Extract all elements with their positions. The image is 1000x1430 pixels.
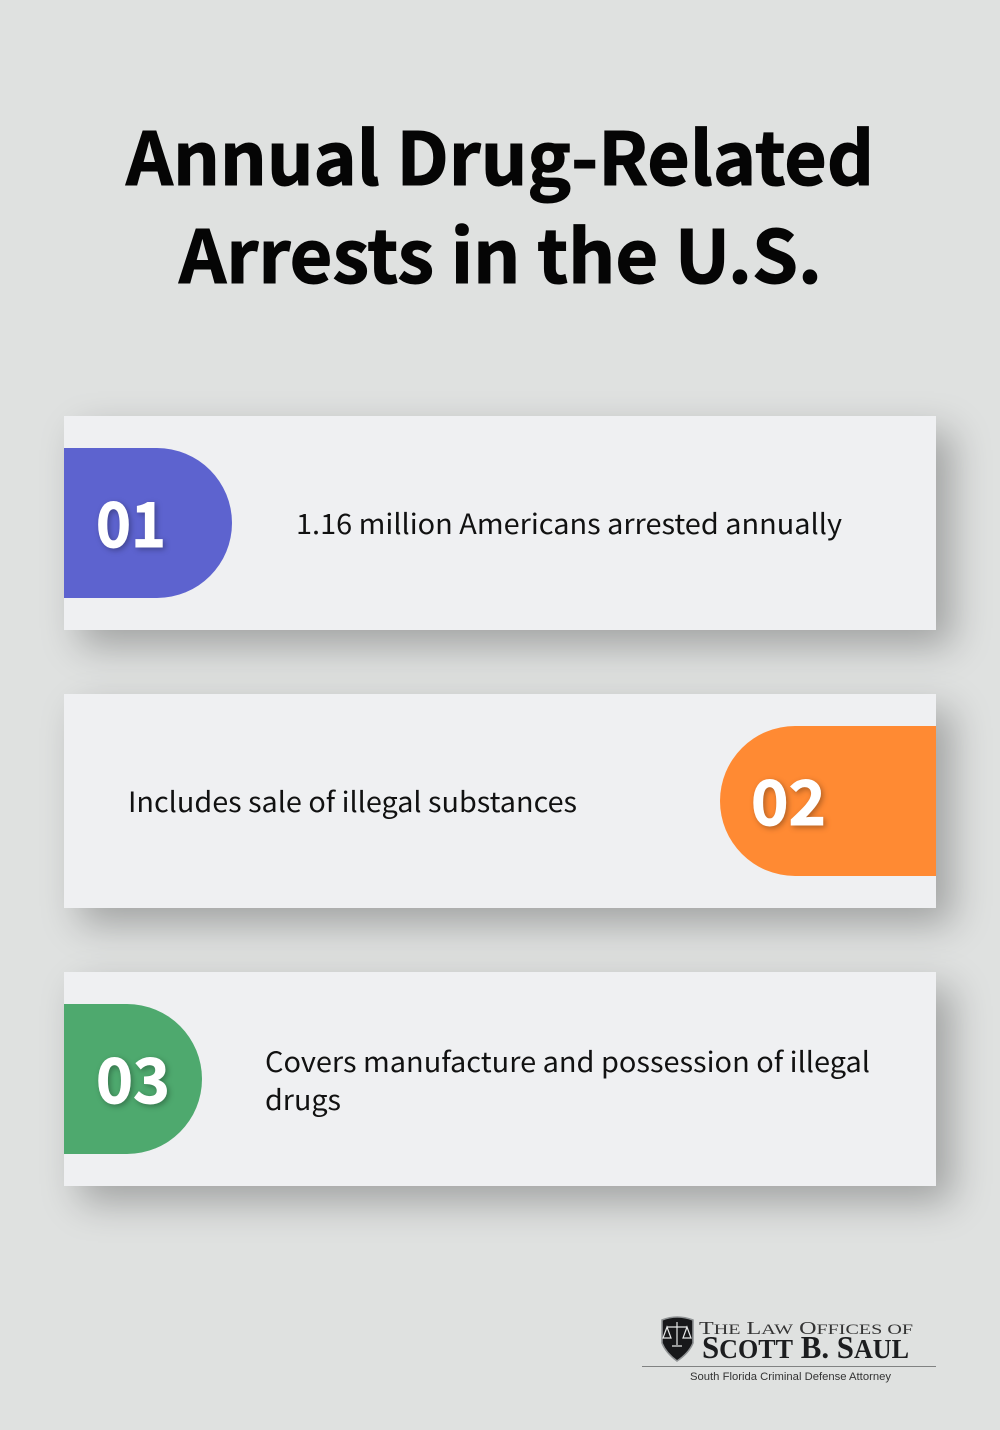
badge: 02 [720, 726, 936, 876]
text: item 03: drugs [265, 1079, 341, 1119]
logo text [642, 1318, 936, 1383]
badge: 03 [64, 1004, 202, 1154]
logo text: SCOTT B. SAUL [702, 1329, 909, 1365]
panel: item 02 [64, 694, 936, 908]
text: item 03 [265, 1041, 870, 1119]
badge: 03: 03 [96, 1031, 170, 1121]
title: Arrests in the U.S. [178, 199, 822, 305]
text: item 03: Covers manufacture and possession of illegal [265, 1041, 870, 1081]
icon: shield with scales [662, 1317, 693, 1361]
panel: item 03 [64, 972, 936, 1186]
logo text: South Florida Criminal Defense Attorney [690, 1371, 892, 1383]
text: item 02: Includes sale of illegal substances [128, 781, 577, 821]
title [125, 101, 874, 305]
badge: 02: 02 [751, 753, 826, 843]
title: Annual Drug-Related [125, 101, 874, 207]
badge: 01 [64, 448, 232, 598]
badge: 01: 01 [96, 475, 166, 565]
logo text: THE L AW O FFICES OF [699, 1318, 913, 1338]
text: item 01: 1.16 million Americans arrested annually [296, 503, 842, 543]
panel: item 01 [64, 416, 936, 630]
